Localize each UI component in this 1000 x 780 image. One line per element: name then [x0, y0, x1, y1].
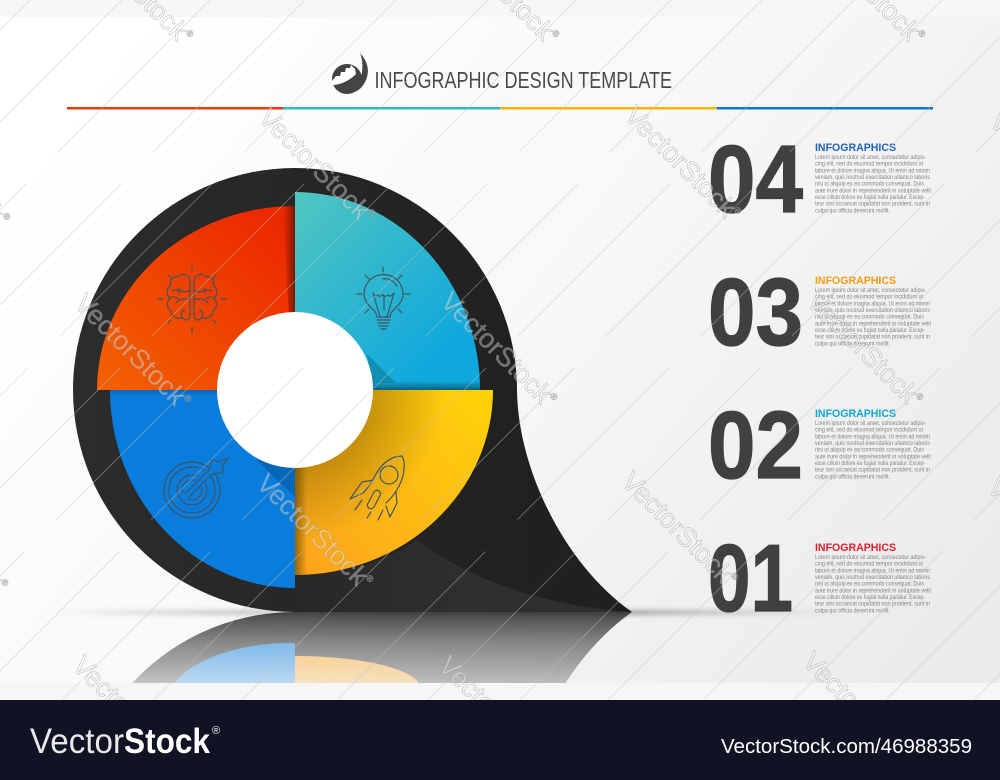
blue top shadow: [110, 390, 230, 396]
body text 04: esse cillum dolore eu fugiat nulla pariatur. Excep-: [815, 195, 925, 201]
watermarks: Vecto: [67, 650, 136, 719]
body text 04: culpa qui officia deserunt mollit.: [815, 208, 890, 214]
body text 02: culpa qui officia deserunt mollit.: [815, 474, 890, 480]
step 01: [708, 525, 931, 632]
body text 01: culpa qui officia deserunt mollit.: [815, 608, 890, 614]
body text 04: Lorem ipsum dolor sit amet, consectetur adipis-: [815, 155, 926, 161]
icon: light bulb: [357, 267, 410, 329]
red shadow: [283, 206, 295, 320]
footer bar: [0, 700, 1000, 780]
header rule: [67, 107, 933, 110]
centre circle: [217, 312, 373, 468]
watermarks: ®: [914, 391, 926, 403]
body text 02: nisi ut aliquip ex ea commodo consequat. Duis: [815, 448, 924, 454]
body text 04: aute irure dolor in reprehenderit in voluptate velit: [815, 188, 931, 194]
body text 01: veniam, quis nostrud exercitation ullamco laboris: [815, 575, 930, 581]
icon: target with arrow: [164, 458, 228, 518]
body text 01: labore et dolore magna aliqua. Ut enim ad minim: [815, 568, 930, 574]
icon: brain: [158, 265, 226, 333]
body text 02: cing elit, sed do eiusmod tempor incididunt ut: [815, 428, 923, 434]
watermarks: ®: [184, 28, 196, 40]
icon: logo: [329, 53, 368, 94]
teal bottom shadow: [372, 381, 480, 390]
body text 02: labore et dolore magna aliqua. Ut enim ad minim: [815, 434, 930, 440]
header: logo and title: [329, 53, 672, 94]
bubble tail highlight: [295, 540, 630, 612]
body text 03: culpa qui officia deserunt mollit.: [815, 341, 890, 347]
speech bubble body: [73, 168, 632, 612]
footer image id: VectorStock.com/46988359: [721, 736, 972, 758]
body text 03: aute irure dolor in reprehenderit in voluptate velit: [815, 321, 931, 327]
watermarks: VectorStock: [616, 466, 739, 589]
watermarks: ®: [916, 28, 928, 40]
body text 04: teur sint occaecat cupidatat non proident, sunt in: [815, 202, 930, 208]
watermarks: VectorStock: [801, 286, 924, 409]
body text 01: nisi ut aliquip ex ea commodo consequat. Duis: [815, 582, 924, 588]
step 02: [708, 392, 931, 499]
watermarks: ®: [1, 211, 13, 223]
body text 02: [815, 421, 931, 480]
watermarks: ®: [732, 205, 744, 217]
heading 04: INFOGRAPHICS: [815, 142, 896, 154]
watermarks: ®: [550, 28, 562, 40]
body text 01: teur sint occaecat cupidatat non proident, sunt in: [815, 602, 930, 608]
body text 03: cing elit, sed do eiusmod tempor incididunt ut: [815, 295, 923, 301]
body text 04: nisi ut aliquip ex ea commodo consequat. Duis: [815, 182, 924, 188]
blue shadow: [256, 460, 295, 497]
segment: blue: [110, 390, 295, 588]
watermarks: ®: [729, 571, 741, 583]
watermarks: VectorStock: [251, 468, 374, 591]
watermarks: ®: [548, 391, 560, 403]
watermarks: ®: [182, 393, 194, 405]
heading 03: INFOGRAPHICS: [815, 275, 896, 287]
segment: yellow: [295, 390, 493, 575]
body text 04: [815, 155, 931, 214]
segment: red: [97, 206, 295, 390]
body text 03: esse cillum dolore eu fugiat nulla pariatur. Excep-: [815, 328, 925, 334]
watermarks: VectorStock: [69, 288, 192, 411]
icon: rocket: [350, 456, 404, 520]
body text 04: cing elit, sed do eiusmod tempor incididunt ut: [815, 162, 923, 168]
body text 03: Lorem ipsum dolor sit amet, consectetur adipis-: [815, 288, 926, 294]
body text 03: [815, 288, 931, 347]
body text 01: cing elit, sed do eiusmod tempor incididunt ut: [815, 562, 923, 568]
number 02: 02: [708, 392, 803, 499]
body text 01: esse cillum dolore eu fugiat nulla pariatur. Excep-: [815, 595, 925, 601]
footer registered mark: ®: [212, 725, 220, 737]
yellow shadow: [295, 390, 434, 575]
watermarks: Vecto: [797, 646, 866, 715]
heading 01: INFOGRAPHICS: [815, 542, 896, 554]
step 04: [708, 126, 931, 233]
segment: teal: [295, 192, 480, 390]
body text 03: teur sint occaecat cupidatat non proident, sunt in: [815, 335, 930, 341]
watermarks: VectorStock: [619, 100, 742, 223]
body text 01: Lorem ipsum dolor sit amet, consectetur adipis-: [815, 555, 926, 561]
body text 04: labore et dolore magna aliqua. Ut enim ad minim: [815, 168, 930, 174]
footer logo: VectorStock: [30, 722, 210, 761]
watermarks: VectorStock: [435, 286, 558, 409]
step 03: [708, 259, 931, 366]
body text 02: esse cillum dolore eu fugiat nulla pariatur. Excep-: [815, 461, 925, 467]
body text 02: Lorem ipsum dolor sit amet, consectetur adipis-: [815, 421, 926, 427]
number 04: 04: [708, 126, 803, 233]
body text 02: teur sint occaecat cupidatat non proident, sunt in: [815, 468, 930, 474]
heading 02: INFOGRAPHICS: [815, 408, 896, 420]
floor shadow: [50, 610, 840, 615]
number 01: 01: [708, 525, 793, 632]
number 03: 03: [708, 259, 803, 366]
watermarks: ®: [366, 207, 378, 219]
body text 04: veniam, quis nostrud exercitation ullamco laboris: [815, 175, 930, 181]
teal corner shadow: [367, 354, 396, 383]
reflection of the speech bubble: [132, 612, 632, 683]
chart: speech bubble pie: [73, 168, 632, 612]
watermarks: VectorStock: [253, 102, 376, 225]
watermarks: Vecto: [433, 650, 502, 719]
body text 02: veniam, quis nostrud exercitation ullamco laboris: [815, 441, 930, 447]
watermarks: ®: [364, 573, 376, 585]
body text 03: labore et dolore magna aliqua. Ut enim ad minim: [815, 301, 930, 307]
body text 03: veniam, quis nostrud exercitation ullamco laboris: [815, 308, 930, 314]
title: INFOGRAPHIC DESIGN TEMPLATE: [374, 67, 672, 93]
body text 02: aute irure dolor in reprehenderit in voluptate velit: [815, 454, 931, 460]
body text 01: [815, 555, 931, 614]
body text 01: aute irure dolor in reprehenderit in voluptate velit: [815, 588, 931, 594]
body text 03: nisi ut aliquip ex ea commodo consequat. Duis: [815, 315, 924, 321]
